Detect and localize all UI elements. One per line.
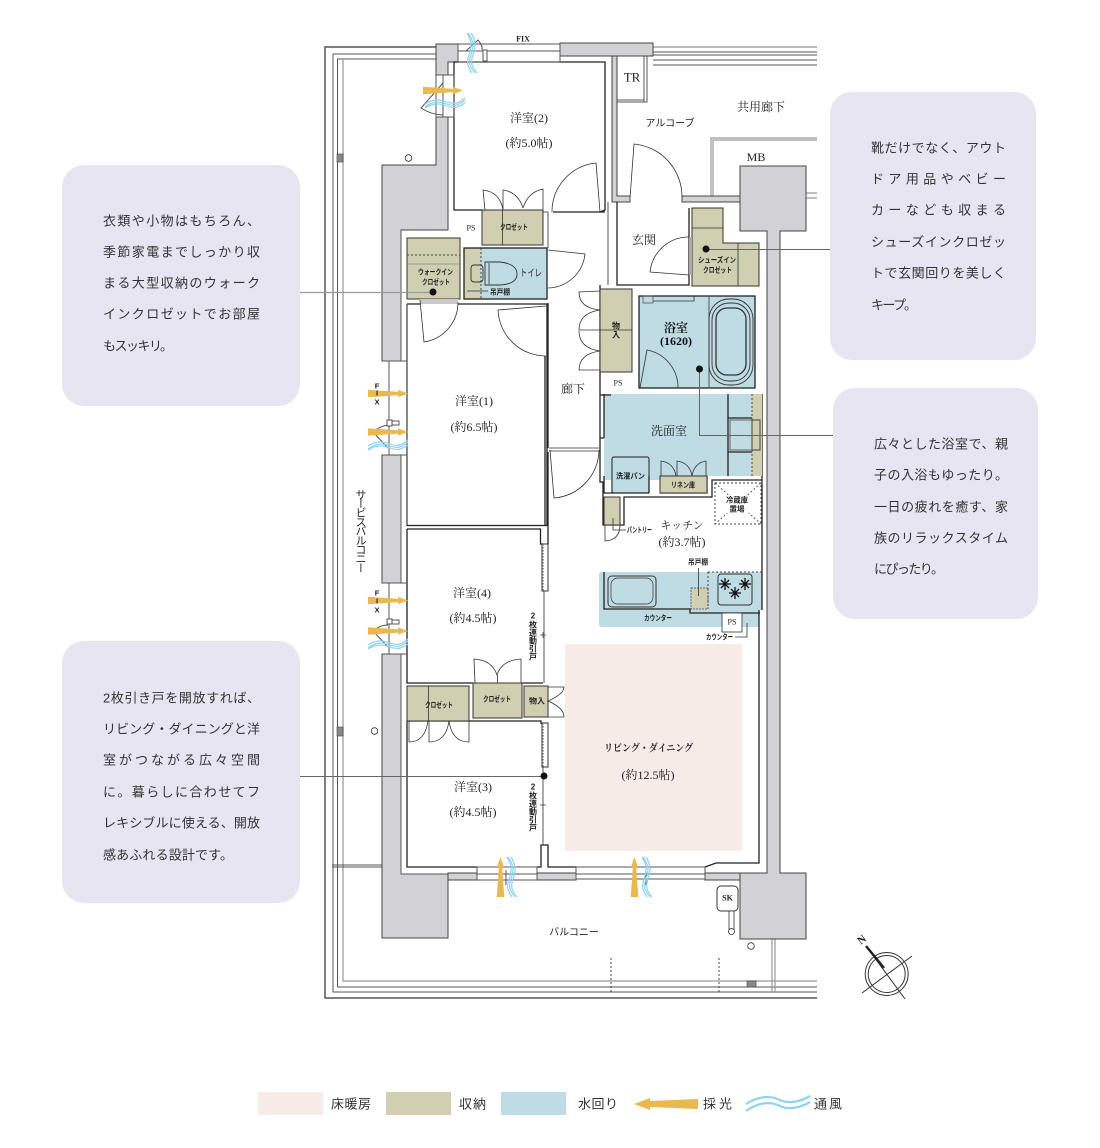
kitchen counter bbox=[604, 556, 762, 642]
room labels: MB bbox=[747, 150, 765, 164]
room labels: 共用廊下 bbox=[737, 99, 785, 114]
room labels: (約5.0帖) bbox=[506, 135, 552, 150]
storage: corridor cupboard: 入 bbox=[612, 330, 620, 340]
panel: bathroom callout: 広々とした浴室で、親 bbox=[874, 436, 1008, 452]
pantry: パントリー bbox=[627, 526, 652, 534]
panel: sliding door callout: リビング・ダイニングと洋 bbox=[103, 722, 260, 736]
legend: storage: 収納 bbox=[459, 1096, 486, 1112]
vertical labels bbox=[354, 488, 538, 833]
windows bbox=[373, 40, 705, 885]
panel: shoes-in closet callout: 靴だけでなく、アウト bbox=[871, 140, 1006, 156]
room labels: X bbox=[374, 606, 380, 614]
panel: walk-in closet callout: もスッキリ。 bbox=[103, 338, 173, 354]
legend bbox=[258, 1092, 842, 1115]
room labels: 廊下 bbox=[561, 381, 585, 396]
room labels: 洋室(2) bbox=[510, 111, 548, 125]
panel: bathroom callout: 子の入浴もゆったり。 bbox=[874, 468, 1008, 482]
bathroom: 浴室 bbox=[664, 320, 688, 335]
storage: closet room 4 bbox=[473, 675, 522, 718]
bathroom bbox=[639, 296, 755, 388]
service sink: SK bbox=[722, 894, 734, 902]
panel: walk-in closet callout: インクロゼットでお部屋 bbox=[103, 306, 260, 322]
toilet room bbox=[464, 248, 547, 299]
panel: walk-in closet callout: 衣類や小物はもちろん、 bbox=[103, 214, 260, 228]
icon: compass bbox=[855, 933, 912, 999]
leader line: walk-in closet bbox=[300, 288, 436, 296]
panel: sliding door callout: 感あふれる設計です。 bbox=[103, 848, 233, 862]
wet area fills bbox=[464, 248, 762, 627]
panel: shoes-in closet callout: キープ。 bbox=[871, 298, 917, 312]
sliding door hatching bbox=[540, 544, 548, 808]
floor plan bbox=[300, 33, 833, 998]
room labels: 洋室(1) bbox=[455, 394, 493, 408]
balcony railing lines bbox=[325, 47, 817, 998]
storage: closet room 3: クロゼット bbox=[425, 700, 453, 710]
legend: light arrow bbox=[634, 1096, 732, 1112]
room labels: 洋室(4) bbox=[453, 586, 491, 600]
panel: bathroom callout: 族のリラックスタイム bbox=[874, 530, 1008, 546]
room labels: X bbox=[374, 398, 380, 406]
room labels: (約12.5帖) bbox=[622, 767, 674, 782]
storage: closet room 4: クロゼット bbox=[483, 694, 511, 704]
room labels: (約4.5帖) bbox=[450, 610, 496, 625]
kitchen counter: カウンター bbox=[706, 632, 733, 642]
storage: closet room 2: クロゼット bbox=[500, 222, 528, 232]
legend: ventilation wave: 通風 bbox=[814, 1096, 842, 1112]
storage: corridor cupboard bbox=[600, 289, 632, 372]
panel: shoes-in closet callout: カーなども収まる bbox=[871, 202, 1006, 218]
room labels: 玄関 bbox=[632, 232, 656, 247]
panel: shoes-in closet callout bbox=[830, 92, 1036, 360]
panel: bathroom callout: にぴったり。 bbox=[874, 562, 944, 576]
panel: walk-in closet callout: 季節家電までしっかり収 bbox=[103, 244, 260, 260]
storage: shoes-in closet bbox=[689, 208, 759, 286]
vertical labels: サービスバルコニー bbox=[354, 488, 366, 572]
storage: closet room 2 bbox=[482, 210, 543, 245]
storage: corridor cupboard: 物 bbox=[612, 320, 620, 330]
arrows: light bbox=[368, 87, 638, 897]
legend: floor heating: 床暖房 bbox=[331, 1096, 371, 1112]
leader line: bathroom bbox=[696, 366, 833, 436]
kitchen counter: PS bbox=[728, 618, 736, 626]
doors bbox=[409, 144, 706, 742]
leader line: sliding door bbox=[300, 772, 548, 780]
room labels: (約4.5帖) bbox=[450, 804, 496, 819]
toilet room: 吊戸棚 bbox=[490, 286, 510, 296]
panel: shoes-in closet callout: トで玄関回りを美しく bbox=[871, 266, 1006, 280]
toilet room: トイレ bbox=[520, 268, 542, 280]
panel: sliding door callout bbox=[62, 641, 300, 903]
storage: closet room 3 bbox=[407, 686, 469, 721]
legend: floor heating bbox=[258, 1092, 371, 1115]
legend: water area bbox=[501, 1092, 618, 1115]
room labels: I bbox=[376, 596, 378, 606]
room labels: F bbox=[375, 588, 380, 598]
panel: shoes-in closet callout: シューズインクロゼッ bbox=[871, 234, 1006, 250]
panel: shoes-in closet callout: ドア用品やベビー bbox=[871, 172, 1006, 186]
washroom: 洗濯パン bbox=[616, 470, 645, 480]
room labels: 洋室(3) bbox=[454, 780, 492, 794]
panel: walk-in closet callout bbox=[62, 165, 300, 406]
panel: walk-in closet callout: まる大型収納のウォーク bbox=[103, 276, 260, 290]
room labels: バルコニー bbox=[549, 926, 599, 938]
legend: ventilation wave bbox=[746, 1096, 842, 1112]
legend: light arrow: 採光 bbox=[703, 1096, 732, 1112]
room labels: I bbox=[376, 388, 378, 398]
storage: shoes-in closet: クロゼット bbox=[703, 264, 732, 274]
floor heating area bbox=[565, 644, 742, 851]
room labels: FIX bbox=[516, 34, 530, 44]
vertical labels: 2枚連動引戸 bbox=[528, 612, 538, 662]
panel: sliding door callout: 2枚引き戸を開放すれば、 bbox=[103, 690, 260, 706]
TR room: TR bbox=[624, 70, 641, 84]
bathroom: (1620) bbox=[660, 334, 692, 348]
fridge space bbox=[715, 483, 761, 524]
vertical labels: 2枚連動引戸 bbox=[528, 782, 538, 833]
service sink bbox=[717, 886, 738, 934]
storage: living room cupboard: 物入 bbox=[529, 696, 546, 706]
room labels: キッチン bbox=[660, 519, 704, 532]
washroom bbox=[612, 394, 762, 493]
storage: walk-in closet: クロゼット bbox=[422, 276, 450, 286]
leader line: shoes-in closet bbox=[702, 246, 830, 252]
kitchen counter: カウンター bbox=[644, 612, 672, 622]
legend: water area: 水回り bbox=[578, 1096, 618, 1112]
room labels: PS bbox=[614, 378, 622, 388]
fridge space: 置場 bbox=[730, 504, 745, 514]
washroom: リネン庫 bbox=[671, 480, 695, 490]
room labels: (約3.7帖) bbox=[658, 534, 706, 549]
icon: compass: N bbox=[855, 933, 869, 947]
fridge space: 冷蔵庫 bbox=[726, 494, 748, 504]
TR room bbox=[617, 56, 647, 102]
room outlines bbox=[401, 62, 762, 874]
storage: shoes-in closet: シューズイン bbox=[698, 254, 736, 264]
structural walls bbox=[382, 43, 806, 939]
storage: walk-in closet: ウォークイン bbox=[418, 266, 453, 276]
panel: sliding door callout: レキシブルに使える、開放 bbox=[103, 816, 260, 830]
storage: walk-in closet bbox=[407, 238, 460, 304]
panel: bathroom callout bbox=[833, 388, 1038, 619]
kitchen counter: 吊戸棚 bbox=[688, 556, 708, 566]
room labels: PS bbox=[467, 224, 475, 232]
storage: living room cupboard bbox=[524, 686, 548, 717]
room labels bbox=[374, 34, 785, 938]
room labels: リビング・ダイニング bbox=[604, 742, 693, 754]
waves: ventilation bbox=[368, 33, 652, 897]
washroom: 洗面室 bbox=[651, 423, 687, 438]
room labels: (約6.5帖) bbox=[450, 419, 498, 434]
legend: storage bbox=[386, 1092, 486, 1115]
panel: bathroom callout: 一日の疲れを癒す、家 bbox=[874, 500, 1008, 514]
pantry bbox=[604, 497, 652, 534]
room labels: F bbox=[375, 382, 380, 390]
panel: sliding door callout: 室がつながる広々空間 bbox=[103, 752, 260, 768]
room labels: アルコーブ bbox=[645, 116, 695, 130]
panel: sliding door callout: に。暮らしに合わせてフ bbox=[103, 784, 260, 800]
